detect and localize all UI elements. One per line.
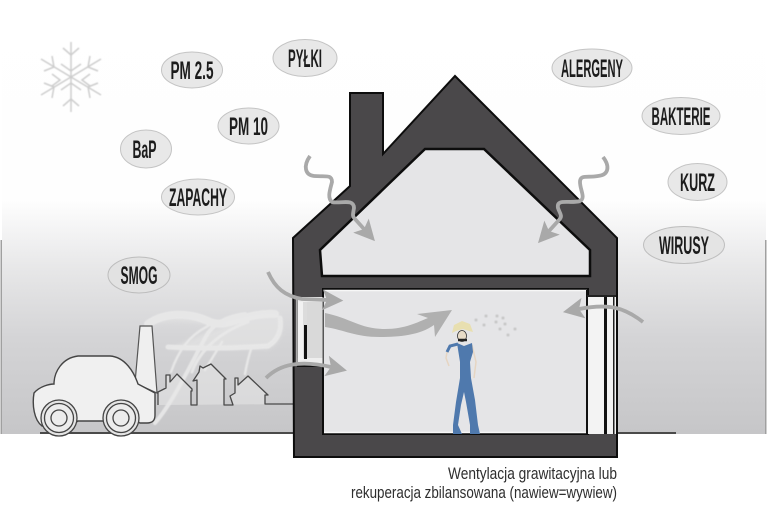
ground floor room	[323, 289, 588, 434]
label: PM 10	[218, 108, 279, 144]
house structure	[293, 76, 617, 457]
right window	[586, 290, 616, 434]
label: PYŁKI	[273, 40, 337, 76]
label: BaP: BaP	[132, 136, 156, 164]
label: KURZ	[668, 164, 727, 200]
figure: person with mask	[446, 321, 480, 434]
label: ZAPACHY: ZAPACHY	[169, 184, 227, 212]
car wheel right	[103, 400, 139, 436]
smog haze	[150, 314, 282, 349]
label: PM 2.5: PM 2.5	[170, 57, 214, 85]
house shell	[293, 76, 617, 457]
sneeze particles	[474, 314, 516, 336]
label: PYŁKI: PYŁKI	[288, 45, 322, 73]
arrow: roof left squiggle	[306, 156, 364, 229]
label: SMOG: SMOG	[120, 262, 158, 290]
arrow: upper left intake	[268, 272, 327, 300]
caption: Wentylacja grawitacyjna lub	[448, 464, 617, 483]
right edge line	[765, 240, 766, 434]
left edge line	[0, 240, 2, 434]
person skin arms	[446, 345, 476, 378]
smog streams	[148, 314, 280, 423]
label: BAKTERIE	[642, 98, 720, 134]
attic room	[320, 149, 590, 276]
arrow: lower left intake	[266, 364, 331, 378]
label: ALERGENY: ALERGENY	[561, 55, 623, 83]
icon: car	[33, 356, 155, 436]
person body	[453, 343, 480, 434]
ground line	[40, 432, 676, 434]
left window	[296, 297, 324, 367]
label: PM 2.5	[162, 52, 222, 88]
icon: factory chimney	[135, 326, 157, 393]
arrow: right intake	[579, 307, 643, 322]
label: ZAPACHY	[162, 179, 234, 215]
person arm	[447, 344, 458, 352]
person mask	[458, 339, 467, 341]
label: SMOG	[108, 257, 170, 293]
car wheel left	[41, 400, 77, 436]
caption	[351, 464, 617, 502]
label: BaP	[120, 130, 172, 168]
person head	[458, 330, 466, 342]
arrow: roof right squiggle	[549, 157, 607, 231]
arrow: large inflow toward person	[325, 310, 452, 337]
label: WIRUSY	[644, 226, 724, 264]
icon: snowflake	[41, 42, 101, 112]
label: PM 10: PM 10	[229, 113, 268, 141]
label: KURZ: KURZ	[680, 169, 715, 197]
label: ALERGENY	[552, 49, 632, 87]
icon: houses skyline	[158, 364, 296, 405]
caption: rekuperacja zbilansowana (nawiew=wywiew)	[351, 483, 617, 502]
person hair	[452, 321, 473, 333]
room highlight lines	[324, 290, 587, 432]
label: WIRUSY: WIRUSY	[659, 232, 709, 260]
